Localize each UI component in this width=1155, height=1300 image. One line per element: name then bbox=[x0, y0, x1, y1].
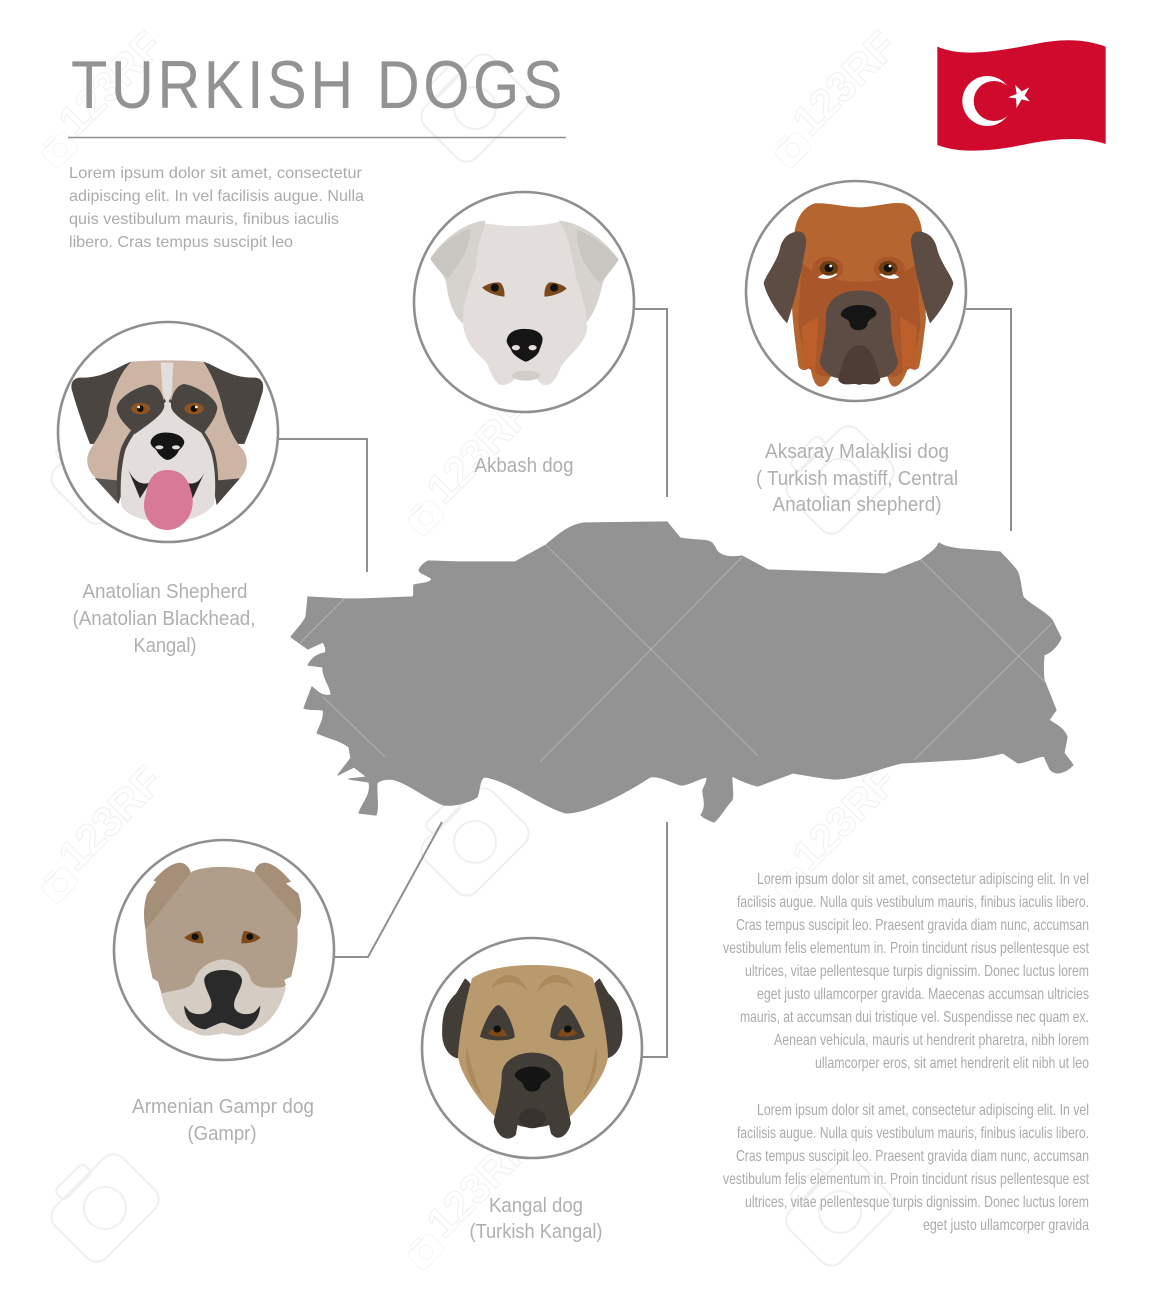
connector: Akbash bbox=[634, 309, 667, 497]
label: Kangal dog: (Turkish Kangal) bbox=[470, 1221, 602, 1243]
intro paragraph: quis vestibulum mauris, finibus iaculis bbox=[69, 211, 339, 228]
label: Armenian Gampr dog bbox=[132, 1096, 314, 1145]
label: Anatolian Shepherd bbox=[72, 581, 256, 657]
connector: Aksaray Malaklisi bbox=[966, 309, 1011, 531]
map of Turkey bbox=[291, 522, 1073, 822]
watermark pattern: 123RF bbox=[783, 22, 906, 144]
dog portrait: Aksaray Malaklisi bbox=[746, 181, 966, 401]
dog portrait: Kangal bbox=[422, 938, 642, 1158]
intro paragraph: Lorem ipsum dolor sit amet, consectetur bbox=[69, 165, 363, 182]
label: Aksaray Malaklisi dog: Aksaray Malaklisi dog bbox=[765, 441, 949, 463]
connector: Armenian Gampr bbox=[335, 822, 442, 957]
intro paragraph: libero. Cras tempus suscipit leo bbox=[69, 234, 293, 251]
connector: Kangal bbox=[642, 822, 667, 1057]
label: Kangal dog: Kangal dog bbox=[489, 1195, 583, 1217]
label: Aksaray Malaklisi dog: Anatolian shepherd) bbox=[772, 494, 942, 516]
title: TURKISH DOGS bbox=[71, 47, 566, 123]
label: Aksaray Malaklisi dog bbox=[756, 441, 958, 516]
label: Anatolian Shepherd: Kangal) bbox=[134, 635, 196, 657]
watermark pattern bbox=[37, 22, 906, 1272]
body paragraph 2: eget justo ullamcorper gravida bbox=[923, 1217, 1089, 1234]
flag of Turkey bbox=[937, 40, 1106, 151]
dog portrait: Armenian Gampr bbox=[114, 840, 334, 1060]
body paragraph 1 bbox=[723, 871, 1089, 1072]
dog portrait: Akbash bbox=[414, 192, 634, 412]
connector: Anatolian Shepherd bbox=[278, 439, 367, 572]
label: Anatolian Shepherd: (Anatolian Blackhead, bbox=[72, 608, 256, 630]
intro paragraph bbox=[69, 165, 364, 251]
watermark pattern: 123RF bbox=[49, 22, 172, 144]
label: Kangal dog bbox=[470, 1195, 602, 1243]
intro paragraph: adipiscing elit. In vel facilisis augue. Nulla bbox=[69, 188, 364, 205]
watermark pattern: 123RF bbox=[783, 757, 906, 879]
body paragraph 2 bbox=[723, 1102, 1089, 1234]
label: Armenian Gampr dog: (Gampr) bbox=[188, 1123, 256, 1145]
watermark pattern: 123RF bbox=[417, 1124, 540, 1246]
watermark pattern: 123RF bbox=[49, 757, 172, 879]
watermark pattern: 123RF bbox=[417, 390, 540, 512]
label: Armenian Gampr dog: Armenian Gampr dog bbox=[132, 1096, 314, 1118]
label: Anatolian Shepherd: Anatolian Shepherd bbox=[82, 581, 248, 603]
label: Akbash dog: Akbash dog bbox=[474, 455, 574, 477]
label: Aksaray Malaklisi dog: ( Turkish mastiff, Central bbox=[756, 468, 958, 490]
dog portrait: Anatolian Shepherd bbox=[58, 322, 278, 542]
